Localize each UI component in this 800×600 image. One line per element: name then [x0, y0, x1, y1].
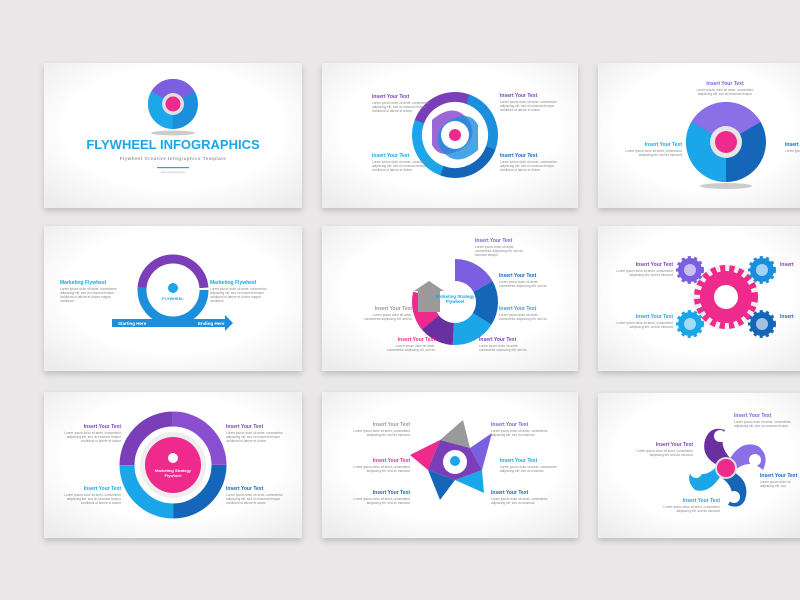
- text: bottom left: incididunt ut labore et dolore: [372, 168, 412, 172]
- text: bottom left: consectetur adipiscing elit, sed do: [387, 348, 435, 352]
- text: bottom right: adipiscing elit, sed do eiusmod: [491, 501, 535, 505]
- text: left: [60, 280, 118, 303]
- chart: ring: Marketing Strategy: [155, 468, 192, 473]
- slide 2: intertwined flywheel: [322, 63, 578, 208]
- text: right 1: [499, 273, 547, 288]
- text: bottom right: Insert Your Text: [226, 486, 264, 492]
- text: left top: adipiscing elit, sed do eiusmod: [630, 273, 673, 277]
- text: left: Insert Your Text: [645, 142, 682, 148]
- text: top left: [372, 94, 430, 113]
- text: right: Lorem ipsum dolor sit: [760, 480, 791, 484]
- text: right 1: consectetur adipiscing elit, sed do: [499, 284, 547, 288]
- text: top: Lorem ipsum dolor sit amet, consectetur: [697, 88, 754, 92]
- text: left: [364, 306, 412, 321]
- text: right: Lorem ipsum dolor sit amet, consectetur: [210, 287, 268, 291]
- text: bottom left: [64, 486, 122, 505]
- text: top: Lorem ipsum dolor sit amet, consectetur: [734, 420, 792, 424]
- text: bottom left: Lorem ipsum dolor sit amet, consectetur: [353, 497, 411, 501]
- icon: title wheel: [148, 79, 198, 136]
- text: left: Marketing Flywheel: [60, 280, 107, 286]
- text: left bottom: Insert Your Text: [636, 314, 673, 320]
- text: right: incididunt ut labore et dolore magna: [210, 295, 261, 299]
- slide 6: gears: [598, 226, 800, 371]
- text: top right: [226, 424, 284, 443]
- text: left: adipiscing elit, sed do eiusmod: [650, 453, 693, 457]
- text: top left: incididunt ut labore et dolore: [372, 109, 412, 113]
- title text: FLYWHEEL INFOGRAPHICS: [86, 137, 260, 152]
- text: top right: adipiscing elit, sed do eiusmod tempor: [500, 104, 555, 108]
- slide 1: title slide: www.yourwebsite.com: [161, 171, 185, 174]
- chart: gears: [678, 258, 774, 336]
- text: top left: Lorem ipsum dolor sit amet, consectetur: [64, 431, 122, 435]
- text: left: Lorem ipsum dolor sit amet, consectetur: [625, 149, 683, 153]
- text: top left: adipiscing elit, sed do eiusmod tempor: [67, 435, 122, 439]
- text: bottom right: [226, 486, 284, 505]
- text: right: Insert Your Text: [760, 473, 798, 479]
- text: left: [625, 142, 683, 157]
- slide 9: swirl flywheel: [598, 393, 800, 538]
- text: bottom right: Lorem ipsum dolor sit amet, consectetur: [500, 160, 558, 164]
- text: bottom left: Lorem ipsum dolor sit amet,: [396, 344, 435, 348]
- text: top left: Lorem ipsum dolor sit amet, consectetur: [353, 429, 411, 433]
- text: bottom right: incididunt ut labore et dolore: [500, 168, 540, 172]
- text: left: adipiscing elit, sed do eiusmod: [639, 153, 682, 157]
- text: mid left: Lorem ipsum dolor sit amet, consectetur: [353, 465, 411, 469]
- slide 8: star flywheel: [322, 392, 578, 538]
- text: left: Insert Your Text: [375, 306, 412, 312]
- text: mid right: adipiscing elit, sed do eiusmod: [500, 469, 544, 473]
- text: left bottom: adipiscing elit, sed do eiusmod: [630, 325, 673, 329]
- text: top right: adipiscing elit, sed do eiusmod: [491, 433, 535, 437]
- text: right: adipiscing elit, sed do eiusmod tempor: [210, 291, 265, 295]
- text: top right: [475, 238, 523, 257]
- text: bottom right: incididunt ut labore et dolore: [226, 501, 266, 505]
- text: top: Insert Your Text: [734, 413, 772, 419]
- text: right: [210, 280, 268, 303]
- chart: puzzle ring: Flywheel: [446, 299, 464, 304]
- text: bottom left: incididunt ut labore et dolore: [81, 501, 121, 505]
- arrow: starting to ending: Ending Here: [198, 321, 225, 326]
- text: right: Marketing Flywheel: [210, 280, 257, 286]
- text: left: adipiscing elit, sed do eiusmod tempor: [60, 291, 115, 295]
- text: top left: [353, 422, 411, 437]
- text: mid right: [500, 458, 558, 473]
- text: bottom left: [353, 490, 411, 505]
- text: bottom left: adipiscing elit, sed do eiusmod: [367, 501, 410, 505]
- text: bottom left: adipiscing elit, sed do eiusmod tempor: [67, 497, 122, 501]
- chart: ring: Flywheel: [165, 473, 181, 478]
- text: top right: Lorem ipsum dolor sit amet, consectetur: [491, 429, 549, 433]
- text: left: incididunt ut labore et dolore magna: [60, 295, 111, 299]
- text: top right: eiusmod tempor: [475, 253, 499, 257]
- text: top: Insert Your Text: [706, 81, 744, 87]
- text: mid left: [353, 458, 411, 473]
- text: bottom left: adipiscing elit, sed do eiusmod tempor: [372, 164, 427, 168]
- text: top right: Insert Your Text: [226, 424, 264, 430]
- text: right: adipiscing elit, sed: [760, 484, 786, 488]
- text: right 1: Insert Your Text: [499, 273, 537, 279]
- text: left: Lorem ipsum dolor sit amet, consectetur: [636, 449, 694, 453]
- text: right 1: Lorem ipsum dolor sit amet,: [499, 280, 538, 284]
- text: left bottom: [616, 314, 674, 329]
- text: bottom left: Insert Your Text: [398, 337, 435, 343]
- text: bottom left: [372, 153, 430, 172]
- chart: ring: [142, 259, 204, 321]
- text: bottom right: adipiscing elit, sed do eiusmod tempor: [500, 164, 555, 168]
- text: bottom right: Lorem ipsum dolor sit amet, consectetur: [491, 497, 549, 501]
- text: mid left: adipiscing elit, sed do eiusmod: [367, 469, 410, 473]
- text: bottom right: Insert Your Text: [479, 337, 517, 343]
- text: top right: Lorem ipsum dolor sit amet,: [475, 245, 514, 249]
- text: top right: Insert Your Text: [491, 422, 529, 428]
- text: top right: incididunt ut labore et dolore: [226, 439, 266, 443]
- text: right 2: Lorem ipsum dolor sit amet,: [499, 313, 538, 317]
- text: bottom: adipiscing elit, sed do eiusmod: [677, 509, 720, 513]
- text: top: adipiscing elit, sed do eiusmod tempor: [734, 424, 789, 428]
- text: right: [760, 473, 798, 488]
- text: left: Lorem ipsum dolor sit amet, consectetur: [60, 287, 118, 291]
- slide 6: gears: Insert: [780, 314, 794, 320]
- chart: puzzle ring: Marketing Strategy: [436, 294, 475, 299]
- text: bottom right: Insert Your Text: [491, 490, 529, 496]
- text: left top: Insert Your Text: [636, 262, 673, 268]
- chart: star triangles: [410, 420, 492, 500]
- text: right 2: consectetur adipiscing elit, sed do: [499, 317, 547, 321]
- slide 4: marketing flywheel with arrow: [44, 226, 302, 371]
- text: bottom: Lorem ipsum dolor sit amet, consectetur: [663, 505, 721, 509]
- text: bottom right: Lorem ipsum dolor sit amet, consectetur: [226, 493, 284, 497]
- text: left top: [616, 262, 674, 277]
- text: right 2: [499, 306, 547, 321]
- text: top left: incididunt ut labore et dolore: [81, 439, 121, 443]
- text: left: consectetur adipiscing elit, sed do: [364, 317, 412, 321]
- text: top right: Insert Your Text: [475, 238, 513, 244]
- text: bottom right: [491, 490, 549, 505]
- text: bottom right: [479, 337, 527, 352]
- text: bottom right: adipiscing elit, sed do eiusmod tempor: [226, 497, 281, 501]
- text: left bottom: Lorem ipsum dolor sit amet, consectetur: [616, 321, 674, 325]
- slide 5: marketing strategy flywheel puzzle: [322, 226, 578, 371]
- text: top right: [491, 422, 549, 437]
- text: left: Lorem ipsum dolor sit amet,: [373, 313, 412, 317]
- text: mid right: Insert Your Text: [500, 458, 538, 464]
- chart: ring: FLYWHEEL: [162, 296, 184, 301]
- text: right 2: Insert Your Text: [499, 306, 537, 312]
- arrow: starting to ending: [112, 315, 233, 331]
- text: top right: Insert Your Text: [500, 93, 538, 99]
- text: bottom left: Lorem ipsum dolor sit amet, consectetur: [64, 493, 122, 497]
- text: top right: adipiscing elit, sed do eiusmod tempor: [226, 435, 281, 439]
- text: top left: adipiscing elit, sed do eiusmod: [367, 433, 410, 437]
- text: top left: Insert Your Text: [84, 424, 121, 430]
- text: top right: Lorem ipsum dolor sit amet, consectetur: [226, 431, 284, 435]
- text: bottom right: consectetur adipiscing elit, sed do: [479, 348, 527, 352]
- arrow: starting to ending: Starting Here: [118, 321, 147, 326]
- text: bottom right: Insert Your Text: [500, 153, 538, 159]
- text: top right: consectetur adipiscing elit, sed do: [475, 249, 523, 253]
- text: left: [636, 442, 694, 457]
- chart: swirl petals: [689, 429, 766, 507]
- text: top left: [64, 424, 122, 443]
- chart: puzzle ring: [410, 257, 500, 347]
- slide 7: ring flywheel: [44, 392, 302, 538]
- text: left: incididunt: [60, 299, 74, 303]
- slide 3: three-part wheel: [598, 63, 800, 208]
- text: top left: Lorem ipsum dolor sit amet, consectetur: [372, 101, 430, 105]
- text: right: [785, 142, 800, 153]
- text: top: [734, 413, 792, 428]
- subtitle: Flywheel Creative Infographics Template: [120, 156, 226, 161]
- text: top right: incididunt ut labore et dolore: [500, 108, 540, 112]
- chart: ring: [127, 419, 219, 511]
- chart: intertwined rings: [406, 86, 504, 184]
- text: top: adipiscing elit, sed do eiusmod tempor: [698, 92, 753, 96]
- text: top left: Insert Your Text: [373, 422, 410, 428]
- text: bottom left: Insert Your Text: [372, 153, 410, 159]
- text: bottom: Insert Your Text: [683, 498, 720, 504]
- chart: 3-segment wheel: [686, 102, 766, 189]
- text: bottom left: Insert Your Text: [373, 490, 410, 496]
- text: top right: [500, 93, 558, 112]
- text: top: [697, 81, 754, 96]
- text: right: incididunt: [210, 299, 224, 303]
- text: bottom right: Lorem ipsum dolor sit amet,: [479, 344, 518, 348]
- text: top left: adipiscing elit, sed do eiusmod tempor: [372, 105, 427, 109]
- text: bottom right: [500, 153, 558, 172]
- text: bottom left: [387, 337, 435, 352]
- text: top right: Lorem ipsum dolor sit amet, consectetur: [500, 100, 558, 104]
- text: bottom: [663, 498, 721, 513]
- text: bottom left: Insert Your Text: [84, 486, 121, 492]
- slide 1: title slide: [44, 63, 302, 208]
- text: mid left: Insert Your Text: [373, 458, 410, 464]
- text: left: Insert Your Text: [656, 442, 693, 448]
- text: bottom left: Lorem ipsum dolor sit amet, consectetur: [372, 160, 430, 164]
- text: top left: Insert Your Text: [372, 94, 410, 100]
- text: left top: Lorem ipsum dolor sit amet, consectetur: [616, 269, 674, 273]
- text: mid right: Lorem ipsum dolor sit amet, consectetur: [500, 465, 558, 469]
- slide 6: gears: Insert: [780, 262, 794, 268]
